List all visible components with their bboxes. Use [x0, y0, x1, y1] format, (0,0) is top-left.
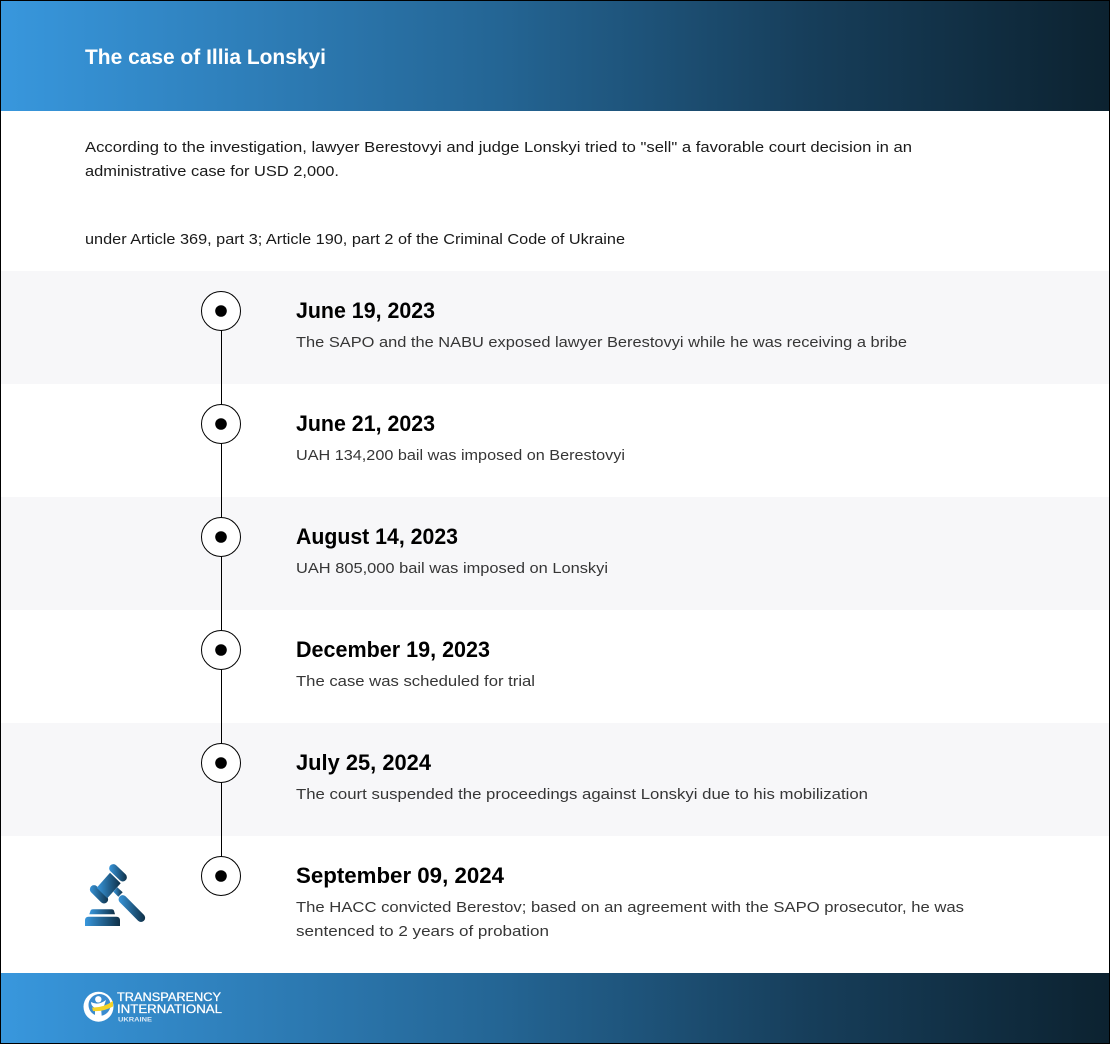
timeline event: July 25, 2024: July 25, 2024: [296, 750, 432, 775]
timeline event: June 19, 2023: June 19, 2023: [296, 298, 435, 323]
timeline event: June 21, 2023: UAH 134,200 bail was imposed on Berestovyi: [296, 447, 625, 464]
timeline event: December 19, 2023: The case was scheduled for trial: [296, 673, 535, 690]
header banner: [1, 1, 1109, 111]
footer banner: [1, 973, 1109, 1043]
intro text: administrative case for USD 2,000.: [85, 163, 339, 180]
legal articles note: under Article 369, part 3; Article 190, part 2 of the Criminal Code of Ukraine: [85, 231, 625, 248]
title: The case of Illia Lonskyi: [85, 46, 326, 69]
timeline event: September 09, 2024: September 09, 2024: [296, 863, 505, 888]
logo: Transparency International Ukraine: [84, 992, 223, 1023]
timeline event: September 09, 2024: sentenced to 2 years of probation: [296, 923, 549, 940]
timeline event: December 19, 2023: [202, 630, 535, 690]
timeline event: December 19, 2023: December 19, 2023: [296, 637, 490, 662]
icon: judge gavel: [85, 868, 141, 926]
timeline event: September 09, 2024: The HACC convicted Berestov; based on an agreement with the SAPO prosecutor, he was: [296, 899, 964, 916]
timeline event: June 19, 2023: [202, 292, 907, 351]
timeline event: June 21, 2023: June 21, 2023: [296, 411, 435, 436]
timeline event: July 25, 2024: The court suspended the proceedings against Lonskyi due to his mobilization: [296, 786, 868, 803]
timeline event: June 21, 2023: [202, 404, 625, 464]
intro text: [85, 139, 912, 180]
intro text: According to the investigation, lawyer Berestovyi and judge Lonskyi tried to "sell" a favorable court decision in an: [85, 139, 912, 156]
timeline event: July 25, 2024: [202, 744, 868, 803]
logo: Transparency International Ukraine: UKRAINE: [118, 1016, 152, 1023]
timeline event: June 19, 2023: The SAPO and the NABU exposed lawyer Berestovyi while he was receiving a bribe: [296, 334, 907, 351]
timeline event: August 14, 2023: UAH 805,000 bail was imposed on Lonskyi: [296, 560, 608, 577]
timeline event: September 09, 2024: [202, 856, 964, 940]
timeline event: August 14, 2023: August 14, 2023: [296, 524, 458, 549]
timeline row backgrounds: [1, 271, 1109, 836]
logo: Transparency International Ukraine: TRANSPARENCY: [117, 992, 221, 1004]
timeline connector line: [220, 311, 222, 876]
timeline event: August 14, 2023: [202, 518, 608, 577]
logo: Transparency International Ukraine: INTERNATIONAL: [117, 1004, 223, 1016]
